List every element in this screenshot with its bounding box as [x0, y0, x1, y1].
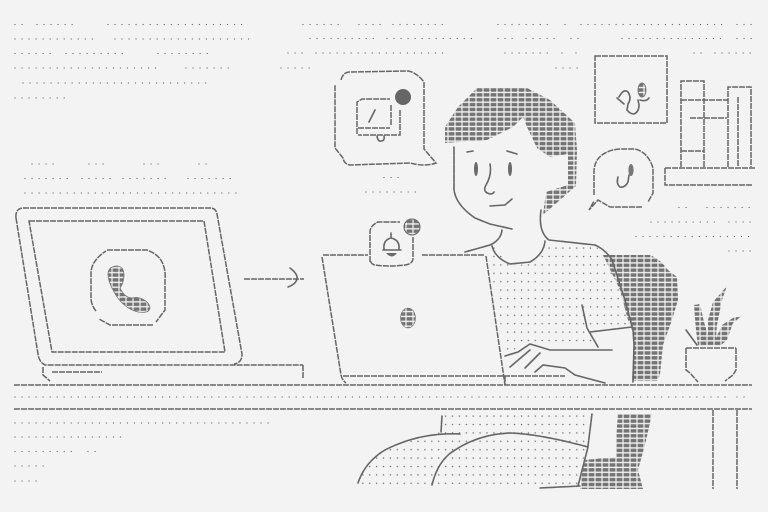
text block: top middle: [281, 24, 474, 68]
bell: [383, 233, 401, 250]
shoulder and sleeve: [582, 245, 634, 382]
alarm icon: [357, 99, 400, 135]
eye right: [508, 162, 512, 176]
hands: [505, 344, 612, 383]
text block: left middle: [25, 164, 238, 193]
picture frame: [595, 56, 667, 123]
book 2: [690, 87, 751, 167]
lid: [322, 255, 565, 385]
text block: top left: [15, 24, 252, 98]
text block: bottom left: [15, 423, 273, 481]
plant: [686, 286, 743, 382]
right laptop: [322, 255, 565, 385]
icon: [617, 175, 629, 187]
base: [43, 365, 303, 381]
chair base: [580, 414, 652, 489]
shelf: [665, 168, 755, 185]
hair: [445, 88, 577, 215]
eyes: [474, 162, 478, 176]
desk legs: [713, 410, 737, 489]
desk: [14, 385, 752, 489]
speech bubble: alarm: [335, 71, 436, 165]
lower body dots: [358, 415, 590, 486]
left laptop: [16, 208, 303, 381]
speech bubble: note: [589, 149, 653, 210]
pot: [686, 348, 736, 382]
torso and legs: [358, 414, 592, 488]
arrow: [244, 268, 304, 287]
shirt dots: [490, 241, 632, 352]
outer screen: [16, 208, 303, 365]
inner screen: [29, 221, 225, 352]
stem: [686, 330, 697, 345]
text block: under speech bubble: [366, 178, 416, 192]
bookshelf: [665, 81, 755, 185]
person: [358, 88, 634, 488]
badge: [404, 219, 420, 235]
icon: squiggle: [617, 91, 649, 114]
badge: [395, 89, 411, 105]
collar: [492, 241, 545, 264]
icon: phone handset: [108, 266, 150, 312]
notification tag: [370, 219, 420, 266]
leaves: [694, 286, 743, 346]
chair back: [603, 255, 678, 381]
brows, nose, smile: [467, 151, 517, 206]
text block: top right: [498, 24, 752, 68]
book 1: [681, 81, 728, 167]
icon: call frame: [91, 250, 165, 325]
text block: right middle: [636, 208, 752, 251]
face outline: [454, 147, 595, 252]
logo: [400, 308, 416, 328]
